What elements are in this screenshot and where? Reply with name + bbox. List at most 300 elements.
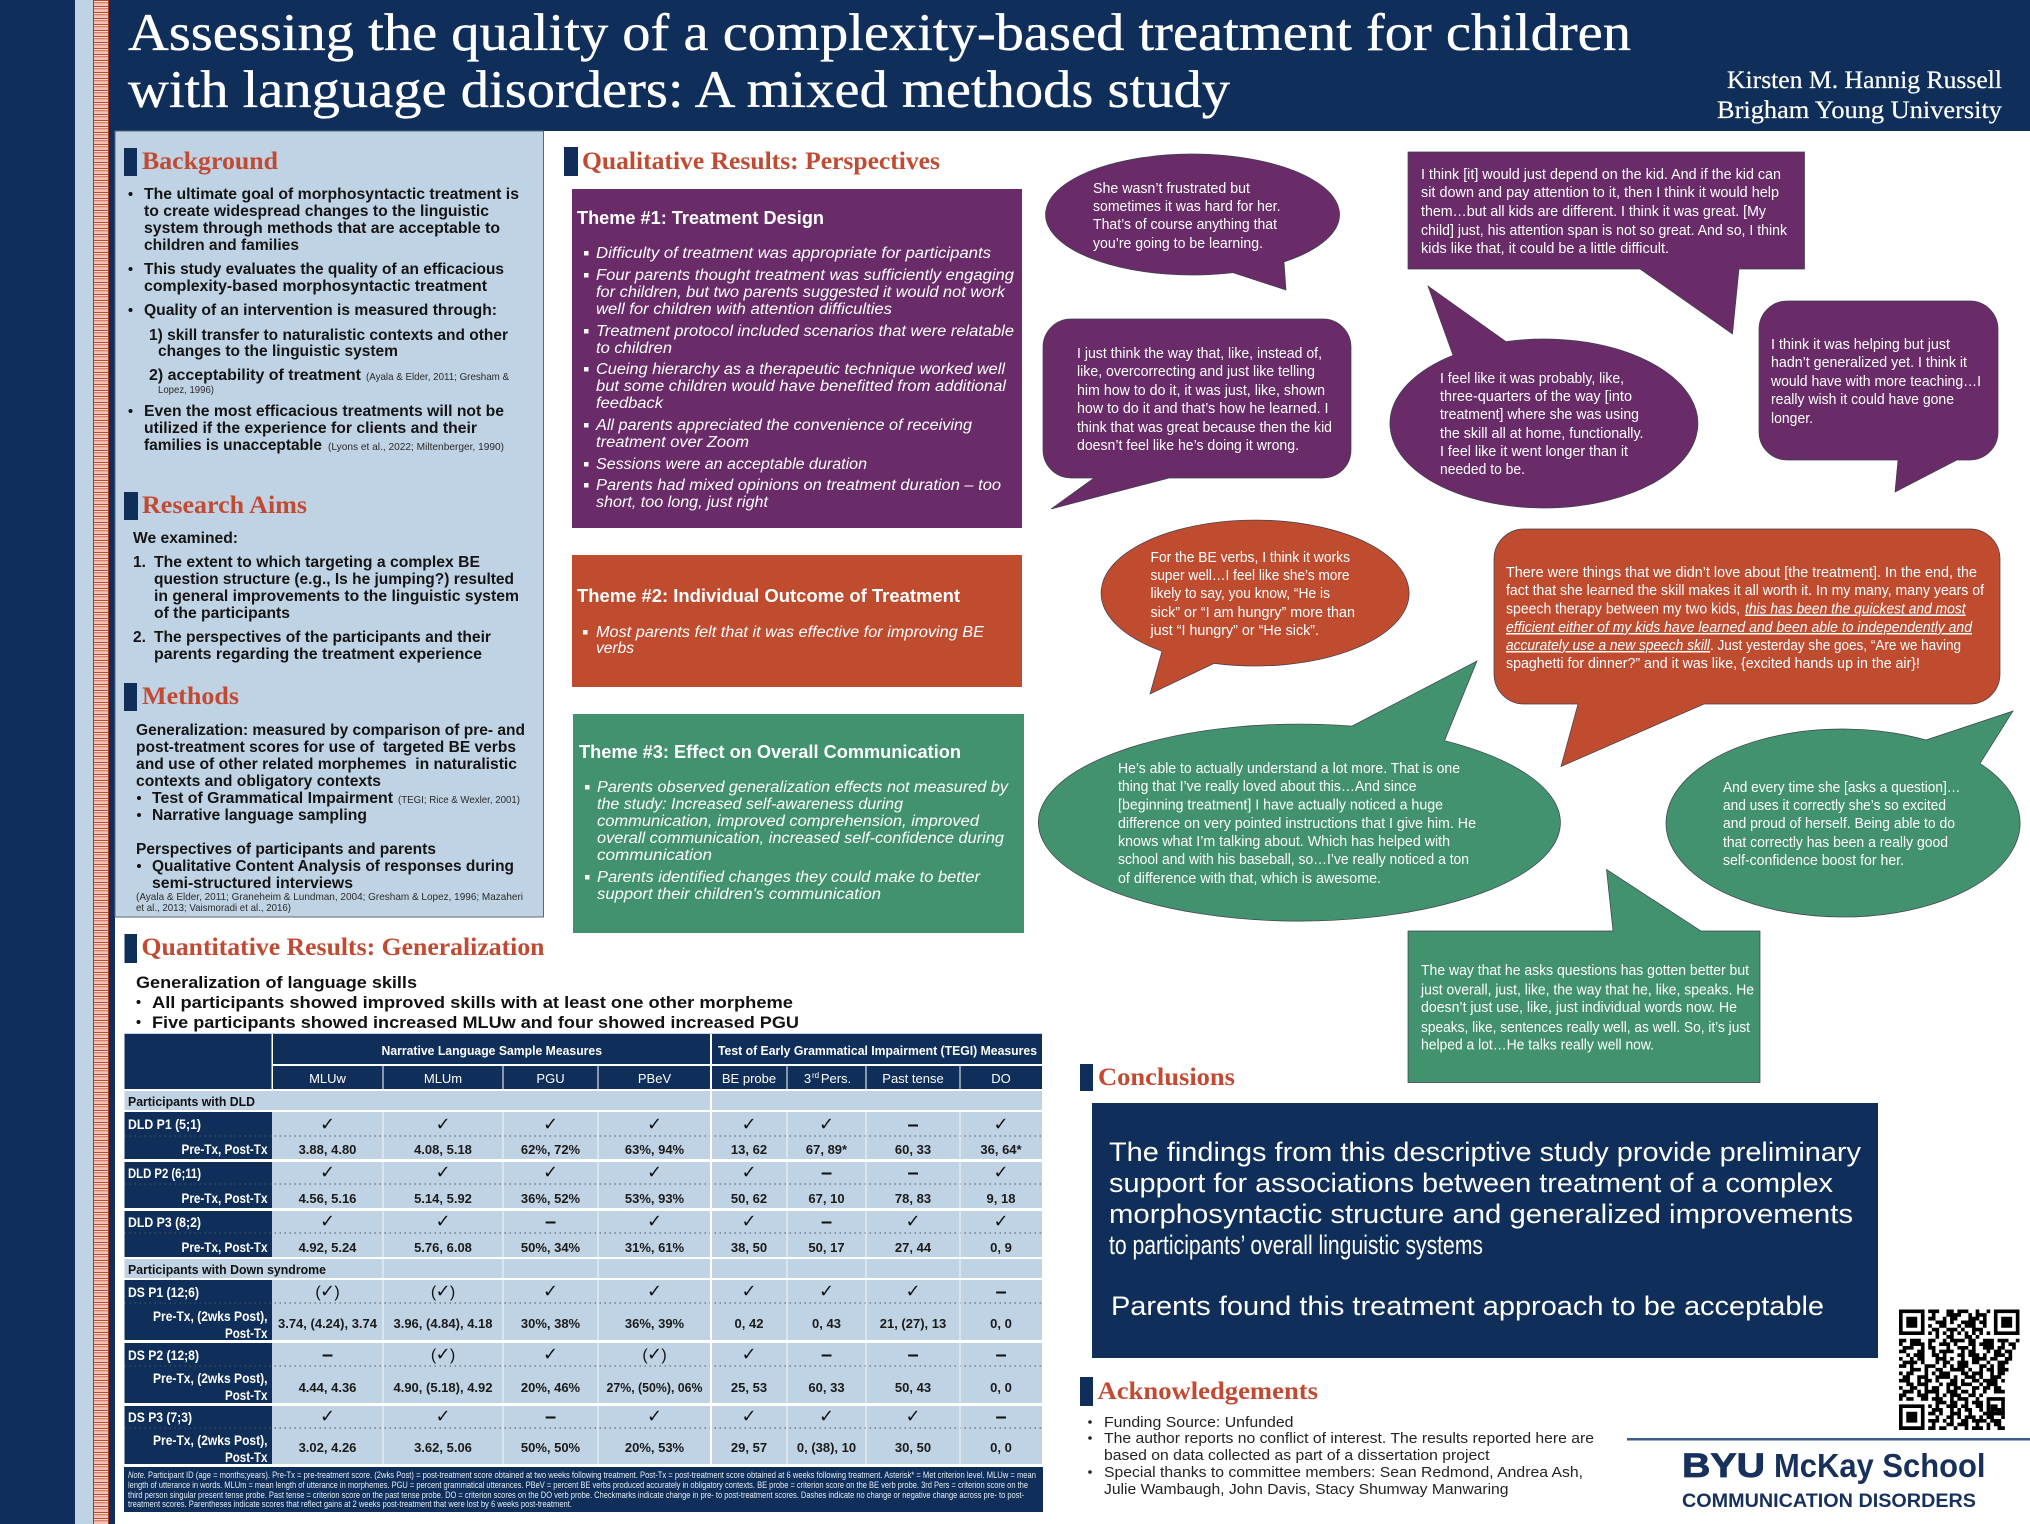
speech bubble: shown how to do it: think that was great because then the kid: [1077, 419, 1332, 436]
row: DS P2: (: [642, 1347, 648, 1364]
row: DLD P3: 31%, 61%: [625, 1240, 685, 1255]
text: methods: and use of other related morphemes in naturalistic: [136, 756, 517, 773]
row: DLD P3: ✓: [741, 1211, 757, 1232]
table header: rd: [812, 1071, 819, 1080]
row: DLD P3: ✓: [905, 1211, 921, 1232]
panel: Theme 1: Theme #1: Treatment Design: [577, 208, 824, 228]
text: acknowledgements: [1088, 1415, 1594, 1498]
heading: Background: Background: [142, 148, 278, 175]
row: DS P2: 50, 43: [895, 1380, 931, 1395]
speech bubble: BE verbs: super well…I feel like she’s more: [1150, 567, 1350, 584]
text: background bullets: changes to the linguistic system: [158, 343, 398, 360]
speech bubble: hard for her: That’s of course anything that: [1093, 216, 1278, 233]
panel: Theme 3: Parents identified changes they could make to better: [597, 869, 981, 886]
row: DS P2: Post-Tx: [225, 1387, 268, 1403]
row: DLD P3: 50%, 34%: [521, 1240, 581, 1255]
row: DS P2: Pre-Tx, (2wks Post),: [153, 1370, 268, 1386]
row: DS P3: ✓: [647, 1406, 662, 1427]
row: DLD P3: ✓: [320, 1211, 335, 1232]
row: DLD P1: ✓: [647, 1114, 662, 1135]
text: background bullets: Even the most efficacious treatments will not be: [144, 403, 504, 420]
speech bubble: BE verbs: sick” or “I am hungry” more than: [1150, 604, 1355, 621]
row: DLD P1: ✓: [320, 1114, 335, 1135]
results table: [124, 1033, 1043, 1512]
speech bubble: self-confidence boost: that correctly has been a really good: [1723, 834, 1948, 851]
speech bubble: BE verbs: For the BE verbs, I think it works: [1150, 549, 1350, 566]
speech bubble: talks really well now: helped a lot…He talks really well now.: [1421, 1036, 1654, 1054]
speech bubble: depends on the kid: them…but all kids are different. I think it was great. [My: [1421, 203, 1766, 220]
row: DLD P2: ✓: [320, 1162, 335, 1183]
row: DS P3: ✓: [435, 1406, 451, 1427]
speech bubble: three-quarters of the way: the skill all at home, functionally.: [1440, 425, 1644, 442]
speech bubble: depends on the kid: [1408, 152, 1804, 334]
row: DS P3: ✓: [819, 1406, 834, 1427]
speech bubble: shown how to do it: how to do it and that’s how he learned. I: [1077, 400, 1328, 417]
row: DLD P3: 50, 17: [808, 1240, 845, 1255]
table note: Note.: [128, 1470, 146, 1480]
row: DS P1: 3.96, (4.84), 4.18: [393, 1316, 493, 1331]
row: DLD P1: 3.88, 4.80: [299, 1142, 356, 1157]
speech bubble: understands a lot more: school and with his baseball, so…I’ve really noticed a ton: [1118, 851, 1469, 868]
logo: BYU McKay School Communication Disorders: [1627, 1438, 2030, 1512]
row: DLD P1: 36, 64*: [980, 1142, 1023, 1157]
title: Assessing the quality of a complexity-based treatment for children: [128, 4, 1631, 62]
row: DS P1: ✓: [905, 1281, 921, 1302]
panel: Theme 1: Sessions were an acceptable duration: [596, 456, 867, 473]
row: DS P3: 0, 0: [990, 1440, 1012, 1455]
text: generalization summary: [136, 973, 799, 1032]
text: background bullets: system through methods that are acceptable to: [144, 220, 500, 237]
panel: Theme 1: treatment over Zoom: [596, 434, 749, 451]
row: DLD P2: 78, 83: [895, 1191, 931, 1206]
table header: PBeV: [638, 1071, 671, 1086]
text: acknowledgements: based on data collected as part of a dissertation project: [1104, 1448, 1490, 1464]
text: background bullets: Lopez, 1996): [158, 384, 214, 396]
row: DS P1: 30%, 38%: [521, 1316, 581, 1331]
row: DLD P1: DLD P1 (5;1): [128, 1116, 201, 1132]
heading: Quantitative Results: Quantitative Results: Generalization: [142, 934, 545, 961]
row: DS P2: ✓: [647, 1344, 662, 1365]
row: DLD P1: ✓: [819, 1114, 834, 1135]
row: DLD P3: 27, 44: [895, 1240, 932, 1255]
text: background bullets: Quality of an intervention is measured through:: [144, 302, 497, 319]
row: DLD P3: –: [821, 1211, 832, 1233]
row: DLD P2: 67, 10: [808, 1191, 845, 1206]
panel: Theme 2: verbs: [596, 640, 634, 657]
author and affiliation: Brigham Young University: [1717, 97, 2003, 124]
speech bubble: quickest and most efficient: There were things that we didn’t love about [the treatment]. In the end, the: [1506, 564, 1977, 581]
panel: conclusions: Parents found this treatment approach to be acceptable: [1111, 1291, 1824, 1321]
author and affiliation: [1717, 67, 2003, 124]
speech bubble: hadn't generalized yet: longer.: [1771, 410, 1813, 427]
row: DS P2: 4.90, (5.18), 4.92: [393, 1380, 493, 1395]
row: DS P3: 50%, 50%: [521, 1440, 581, 1455]
row: DLD P1: Pre-Tx, Post-Tx: [182, 1141, 268, 1157]
text: generalization summary: All participants showed improved skills with at least one other morpheme: [152, 993, 793, 1012]
row: DLD P1: 63%, 94%: [625, 1142, 685, 1157]
panel: Theme 1: to children: [596, 340, 672, 357]
table header: Narrative Language Sample Measures: [382, 1044, 602, 1058]
text: research aims: parents regarding the treatment experience: [154, 646, 482, 663]
table header: Past tense: [882, 1071, 944, 1086]
speech bubble: self-confidence boost: and proud of herself. Being able to do: [1723, 815, 1955, 832]
speech bubble: hard for her: you’re going to be learning.: [1093, 235, 1263, 252]
text: research aims: in general improvements to the linguistic system: [154, 588, 519, 605]
row: DLD P3: 5.76, 6.08: [414, 1240, 472, 1255]
speech bubble: talks really well now: The way that he asks questions has gotten better but: [1421, 962, 1750, 979]
speech bubble: quickest and most efficient: this has been the quickest and most: [1745, 600, 1966, 618]
speech bubble: hard for her: [1046, 154, 1340, 290]
speech bubble: quickest and most efficient: . Just yesterday she goes, “Are we having: [1710, 637, 1961, 654]
table header: Test of Early Grammatical Impairment (TEGI) Measures: [718, 1044, 1037, 1058]
row: DS P1: Post-Tx: [225, 1325, 268, 1341]
text: research aims: The extent to which targeting a complex BE: [154, 554, 480, 571]
text: background bullets: (Lyons et al., 2022; Miltenberger, 1990): [328, 441, 504, 453]
row: DLD P2: ✓: [543, 1162, 558, 1183]
table header: BE probe: [722, 1071, 776, 1086]
text: methods: semi-structured interviews: [152, 875, 353, 892]
panel: Theme 3: [573, 714, 1024, 933]
row: DS P1: ✓: [320, 1281, 335, 1302]
panel: conclusions: The findings from this descriptive study provide preliminary: [1109, 1137, 1862, 1167]
row: DLD P1: ✓: [543, 1114, 558, 1135]
text: research aims: We examined:: [133, 530, 238, 547]
row: DLD P3: 0, 9: [990, 1240, 1012, 1255]
row: DLD P2: 5.14, 5.92: [414, 1191, 472, 1206]
text: generalization summary: Generalization of language skills: [136, 973, 417, 992]
logo: BYU McKay School Communication Disorders: McKay School: [1774, 1447, 1986, 1484]
row: DLD P1: –: [907, 1114, 919, 1136]
text: research aims: The perspectives of the participants and their: [154, 629, 491, 646]
logo: BYU McKay School Communication Disorders: COMMUNICATION DISORDERS: [1682, 1490, 1976, 1512]
row: DS P3: [124, 1406, 1042, 1465]
row: DS P2: DS P2 (12;8): [128, 1347, 199, 1363]
row: DLD P3: 4.92, 5.24: [299, 1240, 357, 1255]
speech bubble: hadn't generalized yet: [1759, 301, 1998, 492]
speech bubble: three-quarters of the way: I feel like it went longer than it: [1440, 443, 1629, 460]
row: DLD P2: 50, 62: [731, 1191, 767, 1206]
row: DS P1: Pre-Tx, (2wks Post),: [153, 1308, 268, 1324]
panel: Theme 3: communication: [597, 847, 712, 864]
row: DLD P2: DLD P2 (6;11): [128, 1165, 201, 1181]
speech bubble: shown how to do it: doesn’t feel like he’s doing it wrong.: [1077, 437, 1299, 454]
title: [128, 4, 1631, 119]
row: DS P3: 20%, 53%: [625, 1440, 685, 1455]
row: DLD P3: 38, 50: [731, 1240, 767, 1255]
speech bubble: talks really well now: [1408, 870, 1760, 1082]
panel: Theme 3: the study: Increased self-awareness during: [597, 796, 903, 813]
speech bubble: understands a lot more: difference on very pointed instructions that I give him. He: [1118, 815, 1476, 832]
row: DS P3: DS P3 (7;3): [128, 1409, 192, 1425]
row: DS P3: 0, (38), 10: [797, 1440, 856, 1455]
row: DS P2: ✓: [543, 1344, 558, 1365]
panel: Theme 1: All parents appreciated the convenience of receiving: [595, 417, 972, 434]
text: acknowledgements: Special thanks to committee members: Sean Redmond, Andrea Ash,: [1104, 1465, 1583, 1481]
speech bubble: quickest and most efficient: accurately use a new speech skill: [1506, 637, 1711, 654]
table header: Pers.: [821, 1071, 851, 1086]
panel: Theme 1: short, too long, just right: [596, 494, 769, 511]
panel: background, aims and methods: [115, 131, 544, 917]
row: DS P1: ): [450, 1284, 455, 1301]
speech bubble: depends on the kid: I think [it] would just depend on the kid. And if the kid can: [1421, 166, 1781, 183]
row: DS P2: 0, 0: [990, 1380, 1012, 1395]
speech bubble: shown how to do it: him how to do it, it was just, like, shown: [1077, 382, 1325, 399]
speech bubble: understands a lot more: of difference with that, which is awesome.: [1118, 870, 1381, 887]
row: DS P1: [124, 1280, 1042, 1341]
panel: Theme 3: communication, improved comprehension, improved: [597, 813, 980, 830]
row: DLD P1: ✓: [993, 1114, 1009, 1135]
speech bubble: depends on the kid: sit down and pay attention to it, then I think it would help: [1421, 184, 1779, 201]
panel: Theme 1: feedback: [596, 395, 664, 412]
row: DS P1: (: [315, 1284, 321, 1301]
text: background bullets: 1) skill transfer to naturalistic contexts and other: [149, 327, 508, 344]
row: DLD P2: 53%, 93%: [625, 1191, 685, 1206]
header banner: [109, 0, 2030, 131]
speech bubble: self-confidence boost: and uses it correctly she’s so excited: [1723, 797, 1946, 814]
row: DS P2: ✓: [435, 1344, 451, 1365]
row: DLD P2: ✓: [741, 1162, 757, 1183]
text: background bullets: complexity-based morphosyntactic treatment: [144, 278, 487, 295]
speech bubble: self-confidence boost: self-confidence boost for her.: [1723, 852, 1904, 869]
text: background bullets: This study evaluates the quality of an efficacious: [144, 261, 504, 278]
speech bubble: hadn't generalized yet: I think it was helping but just: [1771, 336, 1951, 353]
table header: 3: [804, 1071, 811, 1086]
text: methods: post-treatment scores for use of targeted BE verbs: [136, 739, 516, 756]
group row: Participants with Down syndrome: Participants with Down syndrome: [128, 1262, 326, 1277]
row: DS P2: –: [821, 1344, 832, 1366]
panel: Theme 1: Parents had mixed opinions on treatment duration – too: [596, 477, 1001, 494]
text: background bullets: The ultimate goal of morphosyntactic treatment is: [144, 186, 519, 203]
title: with language disorders: A mixed methods study: [128, 61, 1231, 119]
row: DS P1: 0, 42: [735, 1316, 763, 1331]
row: DLD P1: 60, 33: [895, 1142, 931, 1157]
speech bubble: three-quarters of the way: I feel like it was probably, like,: [1440, 370, 1624, 387]
text: background bullets: families is unacceptable: [144, 437, 322, 454]
table header: [124, 1033, 1042, 1089]
row: DLD P1: ✓: [741, 1114, 757, 1135]
text: generalization summary: Five participants showed increased MLUw and four showed increased PGU: [152, 1013, 799, 1032]
heading: Acknowledgements: Acknowledgements: [1098, 1378, 1318, 1405]
panel: Theme 1: Four parents thought treatment was sufficiently engaging: [596, 267, 1014, 284]
speech bubble: self-confidence boost: And every time she [asks a question]…: [1723, 779, 1960, 796]
row: DS P1: ✓: [435, 1281, 451, 1302]
text: methods: Test of Grammatical Impairment: [152, 790, 393, 807]
row: DS P3: ✓: [905, 1406, 921, 1427]
panel: Theme 2: [572, 555, 1022, 687]
row: DLD P3: ✓: [993, 1211, 1009, 1232]
table header: MLUw: [309, 1071, 347, 1086]
speech bubble: hadn't generalized yet: really wish it could have gone: [1771, 391, 1954, 408]
speech bubble: hadn't generalized yet: would have with more teaching…I: [1770, 373, 1981, 390]
text: background bullets: 2) acceptability of treatment: [149, 367, 361, 384]
text: methods: (Ayala & Elder, 2011; Graneheim & Lundman, 2004; Gresham & Lopez, 1996; Mazaheri: [136, 891, 523, 903]
speech bubble: three-quarters of the way: treatment] where she was using: [1440, 406, 1639, 423]
speech bubble: quickest and most efficient: fact that she learned the skill makes it all worth it. In my many, many years of: [1506, 582, 1985, 599]
row: DLD P1: ✓: [435, 1114, 451, 1135]
table note: length of utterance in words. MLUm = mean length of utterance in morphemes. PGU = percent grammatical utterances. PBeV = percent BE verbs produced accurately in obligatory contexts. BE probe = criterion score on the BE verb probe. 3rd Pers = criterion score on the: [128, 1480, 1028, 1490]
row: DS P3: –: [545, 1406, 556, 1428]
panel: Theme 1: but some children would have benefitted from additional: [596, 378, 1007, 395]
speech bubble: three-quarters of the way: [1390, 286, 1698, 508]
row: DLD P1: 67, 89*: [806, 1142, 848, 1157]
speech bubble: quickest and most efficient: speech therapy between my two kids,: [1506, 600, 1740, 618]
row: DS P3: –: [995, 1406, 1007, 1428]
row: DLD P2: Pre-Tx, Post-Tx: [182, 1190, 268, 1206]
row: DS P2: 60, 33: [808, 1380, 845, 1395]
speech bubble: understands a lot more: knows what I’m talking about. Which has helped with: [1118, 833, 1450, 850]
row: DS P3: 3.62, 5.06: [414, 1440, 472, 1455]
speech bubble: talks really well now: just overall, just, like, the way that he, like, speaks. He: [1420, 982, 1754, 998]
speech bubble: BE verbs: just “I hungry” or “He sick”.: [1150, 622, 1319, 639]
row: DS P2: ): [661, 1347, 667, 1364]
speech bubble: talks really well now: speaks, like, sentences really well, as well. So, it’s just: [1421, 1019, 1751, 1036]
row: DLD P3: ✓: [647, 1211, 662, 1232]
row: DLD P1: 13, 62: [731, 1142, 767, 1157]
text: background bullets: to create widespread changes to the linguistic: [144, 203, 489, 220]
icon: QR code: [1897, 1308, 2021, 1432]
text: methods: Perspectives of participants and parents: [136, 841, 436, 858]
panel: Theme 1: for children, but two parents suggested it would not work: [596, 284, 1006, 301]
text: methods: Generalization: measured by comparison of pre- and: [136, 722, 525, 739]
row: DS P3: 3.02, 4.26: [299, 1440, 356, 1455]
text: methods: et al., 2013; Vaismoradi et al., 2016): [136, 902, 291, 914]
row: DLD P3: [124, 1211, 1042, 1257]
speech bubble: hadn't generalized yet: hadn’t generalized yet. I think it: [1771, 354, 1968, 371]
group row: Participants with DLD: [124, 1091, 1042, 1110]
row: DLD P3: DLD P3 (8;2): [128, 1214, 201, 1230]
speech bubble: BE verbs: [1101, 520, 1409, 694]
row: DLD P1: 4.08, 5.18: [414, 1142, 472, 1157]
row: DS P1: ✓: [543, 1281, 558, 1302]
table header: DO: [991, 1071, 1011, 1086]
speech bubble: three-quarters of the way: three-quarters of the way [into: [1440, 388, 1632, 405]
row: DS P2: –: [995, 1344, 1007, 1366]
row: DLD P1: 62%, 72%: [521, 1142, 581, 1157]
group row: Participants with DLD: Participants with DLD: [128, 1094, 255, 1109]
heading: Research Aims: Research Aims: [142, 492, 307, 519]
row: DLD P3: Pre-Tx, Post-Tx: [182, 1239, 268, 1255]
row: DS P1: –: [995, 1281, 1007, 1303]
speech bubble: talks really well now: doesn’t just use, like, just individual words now. He: [1421, 999, 1737, 1016]
speech bubble: depends on the kid: kids like that, it could be a little difficult.: [1421, 240, 1669, 257]
row: DS P2: ✓: [741, 1344, 757, 1365]
row: DS P2: 4.44, 4.36: [299, 1380, 356, 1395]
text: methods: Qualitative Content Analysis of responses during: [152, 858, 514, 875]
text: background bullets: utilized if the experience for clients and their: [144, 420, 477, 437]
panel: Theme 1: [572, 189, 1022, 528]
group row: Participants with Down syndrome: [124, 1259, 1042, 1278]
row: DS P3: ✓: [320, 1406, 335, 1427]
row: DS P1: 21, (27), 13: [880, 1316, 946, 1331]
speech bubble: depends on the kid: child] just, his attention span is not so great. And so, I think: [1421, 222, 1787, 239]
text: research aims: [133, 530, 519, 663]
panel: conclusions: morphosyntactic structure and generalized improvements: [1109, 1199, 1853, 1229]
panel: Theme 3: Parents observed generalization effects not measured by: [597, 779, 1009, 796]
row: DLD P3: –: [545, 1211, 556, 1233]
text: research aims: 2.: [133, 629, 146, 646]
table note: [124, 1467, 1043, 1512]
speech bubble: quickest and most efficient: efficient either of my kids have learned and been able to independently and: [1506, 619, 1973, 636]
speech bubble: shown how to do it: like, overcorrecting and just like telling: [1077, 363, 1315, 380]
logo: BYU McKay School Communication Disorders: BYU: [1682, 1447, 1765, 1485]
row: DLD P2: ✓: [993, 1162, 1009, 1183]
row: DLD P2: 36%, 52%: [521, 1191, 581, 1206]
row: DLD P2: –: [907, 1162, 919, 1184]
row: DS P2: 25, 53: [731, 1380, 767, 1395]
speech bubble: understands a lot more: He’s able to actually understand a lot more. That is one: [1118, 760, 1460, 777]
speech bubble: BE verbs: likely to say, you know, “He is: [1150, 585, 1330, 602]
text: background bullets: [128, 186, 519, 454]
row: DS P3: 30, 50: [895, 1440, 931, 1455]
panel: conclusions: support for associations between treatment of a complex: [1109, 1168, 1834, 1198]
panel: Theme 1: Difficulty of treatment was appropriate for participants: [596, 245, 991, 262]
text: methods: Narrative language sampling: [152, 807, 367, 824]
speech bubble: three-quarters of the way: needed to be.: [1440, 461, 1525, 478]
row: DS P3: Post-Tx: [225, 1449, 268, 1465]
panel: Theme 2: Theme #2: Individual Outcome of Treatment: [577, 586, 960, 606]
speech bubble: shown how to do it: [1043, 319, 1351, 509]
row: DLD P3: ✓: [435, 1211, 451, 1232]
row: DLD P2: ✓: [435, 1162, 451, 1183]
row: DS P2: ): [450, 1347, 455, 1364]
text: background bullets: children and families: [144, 237, 299, 254]
row: DS P2: –: [322, 1344, 333, 1366]
row: DS P1: (: [431, 1284, 437, 1301]
table note: Participant ID (age = months;years). Pre-Tx = pre-treatment score. (2wks Post) = post-treatment score obtained at two weeks following treatment. Post-Tx = post-treatment score obtained at 6 weeks following treatment. Asterisk* = Met criterion level. MLUw = mean: [148, 1470, 1036, 1480]
panel: Theme 1: well for children with attention difficulties: [596, 301, 892, 318]
speech bubble: quickest and most efficient: spaghetti for dinner?” and it was like, {excited hands up in the air}!: [1506, 655, 1920, 672]
panel: conclusions: to participants’ overall linguistic systems: [1109, 1230, 1483, 1260]
table note: treatment scores. Parentheses indicate scores that reflect gains at 2 weeks post-treatment that were lost by 6 weeks post-treatment.: [128, 1499, 572, 1509]
panel: Theme 3: overall communication, increased self-confidence during: [597, 830, 1004, 847]
row: DLD P2: 9, 18: [987, 1191, 1015, 1206]
table header: PGU: [536, 1071, 565, 1086]
panel: Theme 2: Most parents felt that it was effective for improving BE: [596, 624, 985, 641]
panel: conclusions: [1092, 1103, 1878, 1358]
text: methods: contexts and obligatory contexts: [136, 773, 381, 790]
row: DS P2: (: [431, 1347, 437, 1364]
panel: Theme 1: Cueing hierarchy as a therapeutic technique worked well: [596, 361, 1006, 378]
speech bubble: understands a lot more: thing that I’ve really loved about this…And since: [1118, 778, 1416, 795]
table note: third person singular present tense probe. Past tense = criterion score on the past tense probe. DO = criterion scores on the DO verb probe. Checkmarks indicate change in pre- to post-treatment scores. Dashes indicate no change or negative change across pre- to post-: [128, 1490, 1024, 1500]
row: DS P1: 0, 43: [812, 1316, 841, 1331]
row: DLD P2: [124, 1162, 1042, 1208]
row: DS P2: 27%, (50%), 06%: [606, 1380, 703, 1395]
row: DS P1: ✓: [741, 1281, 757, 1302]
heading: Qualitative Results: Qualitative Results: Perspectives: [582, 148, 940, 175]
speech bubble: understands a lot more: [1038, 661, 1560, 921]
text: research aims: of the participants: [154, 605, 290, 622]
row: DLD P2: –: [821, 1162, 832, 1184]
row: DS P3: 29, 57: [731, 1440, 767, 1455]
text: background bullets: (Ayala & Elder, 2011; Gresham &: [366, 371, 509, 383]
row: DS P2: 20%, 46%: [521, 1380, 581, 1395]
speech bubble: hard for her: sometimes it was hard for her.: [1093, 198, 1280, 215]
speech bubble: understands a lot more: [beginning treatment] I have actually noticed a huge: [1118, 796, 1443, 814]
row: DS P1: ): [334, 1284, 340, 1301]
row: DS P2: [124, 1343, 1042, 1403]
speech bubble: self-confidence boost: [1666, 711, 2020, 917]
row: DLD P1: [124, 1112, 1042, 1159]
text: research aims: question structure (e.g., Is he jumping?) resulted: [154, 571, 514, 588]
heading: Methods: Methods: [142, 683, 239, 710]
heading: Conclusions: Conclusions: [1098, 1064, 1235, 1091]
panel: Theme 1: Treatment protocol included scenarios that were relatable: [596, 323, 1014, 340]
row: DLD P2: ✓: [647, 1162, 662, 1183]
speech bubble: quickest and most efficient: [1494, 529, 2000, 766]
row: DS P1: 3.74, (4.24), 3.74: [278, 1316, 378, 1331]
text: research aims: 1.: [133, 554, 146, 571]
